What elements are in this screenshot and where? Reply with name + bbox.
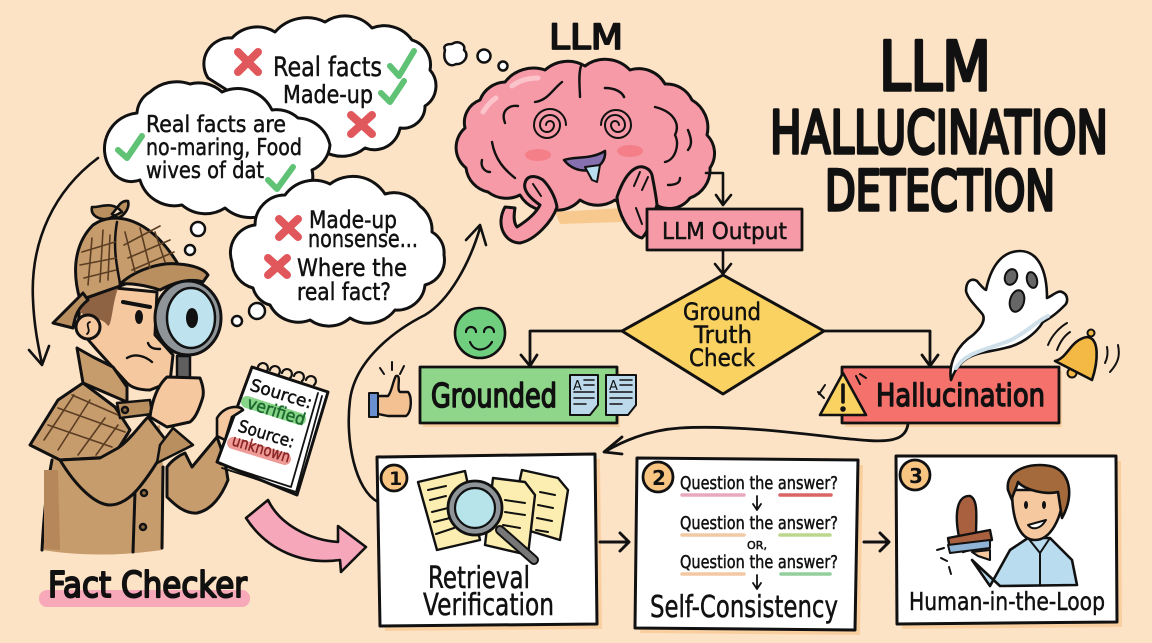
icon: green check [390, 51, 414, 76]
panel: self-consistency: Question the answer? [680, 473, 838, 494]
thought bubble: real facts garbled: Real facts are [146, 112, 286, 138]
icon: smiley [455, 308, 505, 358]
box: grounded: Grounded [431, 376, 557, 415]
cheeks [525, 149, 551, 161]
notebook [217, 363, 328, 495]
mouth and drool [564, 151, 605, 171]
icon: red cross [268, 258, 287, 275]
person with stamp [937, 465, 1077, 586]
thought bubble: real facts and made-up: Made-up [283, 80, 373, 109]
magnifying glass [155, 281, 221, 384]
decision: ground truth check [622, 275, 824, 394]
decision: ground truth check: Check [689, 344, 755, 372]
icon: green check [268, 167, 293, 189]
box: LLM Output [647, 209, 802, 250]
thought bubble: real facts garbled: no-maring, Food [146, 135, 302, 161]
panel: retrieval verification [377, 454, 602, 631]
icon: warning triangle [818, 373, 866, 415]
stamp [957, 496, 976, 552]
swirl eyes [534, 109, 566, 138]
arrow: to grounded [521, 331, 622, 366]
title: DETECTION [825, 159, 1055, 223]
notebook: verified [245, 394, 308, 430]
face [78, 288, 173, 390]
arrow: hallucination to verification [604, 424, 908, 454]
box: LLM Output: LLM Output [662, 219, 787, 245]
arrow: to hallucination [824, 331, 938, 366]
arrow: brain to output [706, 173, 731, 205]
thought bubble: real facts garbled [104, 82, 330, 218]
coat body [42, 425, 163, 554]
label: fact checker: Fact Checker [48, 565, 247, 606]
panel: self-consistency: OR, [747, 539, 767, 552]
icon: document pair: A [573, 379, 582, 394]
hand on magnifier [150, 377, 203, 427]
notebook: Source: [236, 417, 297, 453]
panel: self-consistency [635, 458, 863, 635]
brain thought cloud [444, 42, 508, 70]
thought bubble: real facts garbled: wives of dat [146, 158, 264, 184]
thought bubble: made-up nonsense: Made-up [309, 206, 397, 234]
notebook: Source: [248, 376, 315, 413]
icon: red cross [351, 115, 372, 134]
thought bubble: real facts and made-up [204, 16, 436, 156]
box: hallucination: Hallucination [876, 378, 1045, 414]
panel: retrieval verification: 1 [389, 468, 402, 490]
thought bubble: made-up nonsense: real fact? [297, 278, 391, 306]
brain character [456, 59, 715, 243]
number badge [643, 462, 673, 492]
number badge [381, 465, 407, 491]
facial features [123, 302, 150, 307]
thought bubble: made-up nonsense: Where the [297, 254, 407, 282]
arms [501, 177, 557, 243]
panel: human-in-the-loop: 3 [909, 464, 923, 488]
panel: self-consistency: Question the answer? [680, 552, 838, 573]
panel: human-in-the-loop [896, 456, 1122, 629]
detective: fact checker figure [30, 201, 228, 554]
label: LLM: LLM [549, 18, 623, 58]
collar [77, 348, 127, 402]
panel: retrieval verification: Verification [423, 588, 554, 623]
icon: green check [381, 81, 404, 102]
title: LLM [879, 28, 991, 107]
icon: thumbs up [369, 362, 411, 417]
ear [76, 315, 100, 339]
icon: bell [1048, 323, 1119, 380]
panel: human-in-the-loop: Human-in-the-Loop [909, 587, 1105, 616]
highlights [247, 402, 300, 419]
pink arrow [246, 500, 366, 572]
title [770, 28, 1108, 223]
hand on notebook [217, 407, 243, 440]
sleeve [60, 417, 168, 505]
arrow: thoughts to detective [29, 158, 98, 365]
panel: self-consistency: 2 [652, 466, 666, 490]
number badge [900, 460, 930, 490]
thought bubble: made-up nonsense [230, 176, 444, 326]
notebook: unknown [230, 431, 293, 466]
icon: green check [118, 136, 142, 158]
icon: document pair [570, 375, 636, 415]
icon: documents and magnifier [418, 470, 568, 560]
decision: ground truth check: Ground [683, 298, 761, 326]
right arm and notebook hand [167, 437, 228, 513]
cape [30, 383, 130, 460]
strap [117, 400, 152, 418]
arrow: output to check [715, 250, 731, 274]
panel: self-consistency: Self-Consistency [650, 590, 838, 625]
box: grounded [420, 367, 620, 427]
thought dots [185, 222, 265, 326]
icon: red cross [238, 52, 258, 72]
decision: ground truth check: Truth [693, 321, 752, 349]
brain folds [482, 66, 691, 185]
box: hallucination [842, 367, 1062, 427]
thought bubble: made-up nonsense: nonsense... [308, 225, 418, 253]
panel: retrieval verification: Retrieval [428, 561, 530, 596]
brain highlights [483, 78, 538, 112]
icon: document pair: A [609, 379, 618, 394]
icon: ghost [950, 251, 1067, 380]
long arrow: verification back to LLM [349, 225, 486, 502]
arrow: step 1 to 2 [600, 533, 629, 551]
icon: red cross [279, 219, 298, 237]
hat [92, 201, 128, 219]
panel: self-consistency: Question the answer? [680, 513, 838, 534]
thought bubble: real facts and made-up: Real facts [273, 52, 382, 83]
arrow: step 2 to 3 [864, 533, 889, 551]
